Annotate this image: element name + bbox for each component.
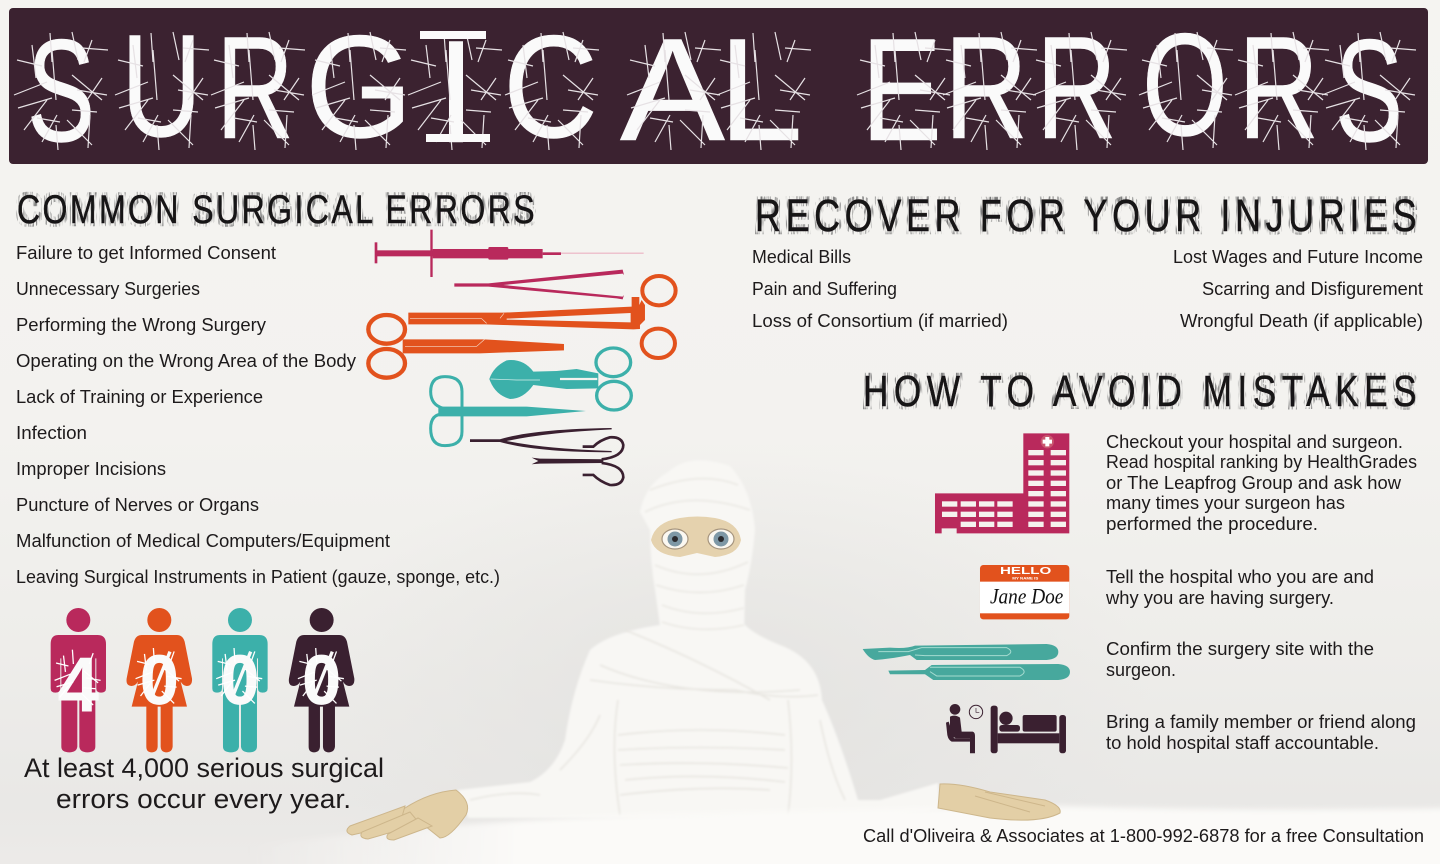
list: common surgical errors: Unnecessary Surgeries — [16, 279, 200, 299]
list: recoverable damages left: Loss of Consortium (if married) — [752, 311, 1008, 331]
list: common surgical errors: Leaving Surgical Instruments in Patient (gauze, sponge, etc.) — [16, 567, 500, 587]
list: common surgical errors: Infection — [16, 423, 87, 443]
figure: orange woman with 0: 0 — [140, 641, 179, 719]
title banner — [9, 3, 1428, 173]
list: common surgical errors: Malfunction of Medical Computers/Equipment — [16, 531, 390, 551]
left hand — [347, 790, 468, 840]
footer call to action: Call d'Oliveira & Associates at 1-800-992-6878 for a free Consultation — [863, 826, 1424, 846]
patient body — [458, 625, 940, 818]
text: check hospital — [1106, 432, 1417, 534]
figure: dark woman with 0: 0 — [302, 641, 341, 719]
icon: name tag: MY NAME IS — [1012, 577, 1039, 581]
figure: teal man with 0 — [212, 608, 268, 752]
figure: orange woman with 0 — [127, 608, 192, 752]
list: common surgical errors: Improper Incisions — [16, 459, 166, 479]
text: check hospital: or The Leapfrog Group and ask how — [1106, 473, 1402, 493]
list: common surgical errors — [16, 243, 500, 587]
title text: G — [305, 5, 413, 168]
icon: scalpels — [863, 644, 1070, 680]
text: bring a friend: Bring a family member or friend along — [1106, 712, 1416, 732]
figure: crimson man with 4: 4 — [57, 641, 99, 729]
title text: errors: O — [1142, 3, 1228, 166]
title text: errors: R — [1036, 6, 1117, 169]
icon: name tag — [980, 565, 1069, 619]
patient face — [651, 516, 741, 557]
stat caption — [24, 753, 384, 814]
bandage folds — [470, 630, 845, 815]
text: check hospital: many times your surgeon has — [1106, 493, 1345, 513]
surgical instruments illustration — [368, 230, 676, 485]
icon: waiting person and hospital bed — [946, 704, 1066, 753]
icon: crimson tweezers — [454, 270, 624, 299]
title text: errors: E — [861, 8, 942, 171]
list: common surgical errors: Performing the Wrong Surgery — [16, 315, 266, 335]
text: bring a friend: to hold hospital staff accountable. — [1106, 733, 1379, 753]
stat pictogram: 4000 people — [51, 608, 354, 752]
title text: U — [121, 4, 202, 167]
text: confirm site: surgeon. — [1106, 660, 1176, 680]
icon: name tag: Jane Doe — [990, 583, 1064, 608]
text: tell the hospital — [1105, 567, 1374, 608]
title text: errors: S — [1335, 9, 1403, 172]
head wraps — [645, 479, 750, 629]
icon: teal bandage scissors — [489, 348, 631, 410]
list: common surgical errors: Puncture of Nerves or Organs — [16, 495, 259, 515]
text: check hospital: Read hospital ranking by HealthGrades — [1106, 452, 1417, 472]
icon: teal scissors — [431, 377, 586, 446]
list: recoverable damages right — [1173, 247, 1423, 331]
icon: hospital — [935, 433, 1069, 533]
figure: teal man with 0: 0 — [221, 641, 259, 719]
text: bring a friend — [1106, 712, 1416, 753]
text: confirm site: Confirm the surgery site with the — [1106, 639, 1374, 659]
title text: errors: R — [1238, 6, 1319, 169]
text: tell the hospital: why you are having surgery. — [1105, 588, 1334, 608]
title text: errors: R — [944, 6, 1028, 169]
icon: orange scissors — [368, 315, 564, 378]
patient eyes — [662, 529, 734, 549]
title text: S — [27, 9, 95, 172]
list: recoverable damages right: Scarring and Disfigurement — [1202, 279, 1423, 299]
text: confirm site — [1106, 639, 1374, 680]
heading: recover for your injuries: RECOVER FOR YOUR INJURIES — [755, 190, 1417, 241]
stat caption: At least 4,000 serious surgical — [24, 753, 384, 783]
title text: L — [718, 8, 803, 171]
list: common surgical errors: Failure to get Informed Consent — [16, 243, 276, 263]
list: recoverable damages left: Pain and Suffering — [752, 279, 897, 299]
icon: dark scissors — [532, 437, 623, 485]
icon: orange forceps — [408, 276, 676, 358]
list: common surgical errors: Operating on the Wrong Area of the Body — [16, 351, 356, 371]
text: check hospital: performed the procedure. — [1106, 514, 1318, 534]
heading: common surgical errors: COMMON SURGICAL ERRORS — [17, 187, 535, 232]
list: common surgical errors: Lack of Training or Experience — [16, 387, 263, 407]
list: recoverable damages right: Wrongful Death (if applicable) — [1180, 311, 1423, 331]
title text: A — [620, 8, 726, 171]
patient head — [640, 460, 755, 640]
text: tell the hospital: Tell the hospital who you are and — [1106, 567, 1374, 587]
figure: dark woman with 0 — [289, 608, 354, 752]
list: recoverable damages left — [752, 247, 1008, 331]
icon: name tag: HELLO — [1000, 566, 1052, 577]
right hand — [938, 784, 1060, 820]
table — [250, 806, 1440, 864]
stat caption: errors occur every year. — [56, 784, 351, 814]
bandaged patient — [250, 460, 1440, 864]
icon: syringe — [375, 230, 644, 277]
title thorns — [14, 31, 1416, 150]
text: check hospital: Checkout your hospital and surgeon. — [1106, 432, 1403, 452]
list: recoverable damages left: Medical Bills — [752, 247, 851, 267]
title text: R — [216, 6, 294, 169]
icon: dark tweezers — [470, 428, 612, 452]
list: recoverable damages right: Lost Wages and Future Income — [1173, 247, 1423, 267]
title text: C — [503, 5, 598, 168]
title text: I — [436, 10, 476, 173]
heading: how to avoid mistakes: HOW TO AVOID MISTAKES — [863, 367, 1417, 416]
figure: crimson man with 4 — [51, 608, 106, 752]
